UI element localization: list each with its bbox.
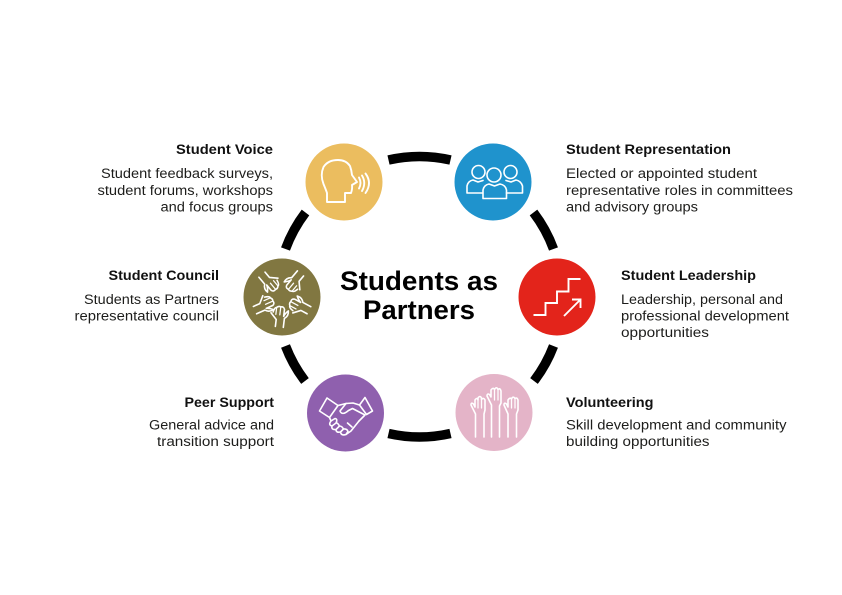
text block: peer support: Peer Support [184,395,275,410]
text block: student voice: Student Voice [176,142,274,157]
text block: student voice: student forums, workshops [98,183,273,198]
text block: volunteering [566,395,787,449]
text block: peer support: transition support [157,434,274,449]
title: Partners [363,295,475,325]
text block: volunteering: Skill development and community [566,418,787,432]
text block: student representation [566,142,793,214]
text block: student leadership: Leadership, personal and [621,292,783,307]
ring of arc segments [286,157,554,437]
text block: student leadership: professional development [621,308,789,324]
text block: student representation: and advisory groups [566,200,698,214]
icon: student leadership, stairs and arrow [518,258,596,336]
icon: student representation, three people [454,144,532,220]
text block: student voice: Student feedback surveys, [101,166,273,181]
icon: student voice, speaking head [306,144,382,220]
text block: student voice [98,142,274,214]
text block: student representation: Student Representation [566,142,731,157]
text block: student council: Student Council [108,268,219,283]
text block: volunteering: Volunteering [566,395,654,410]
text block: student voice: and focus groups [160,200,273,214]
text block: student leadership: Student Leadership [621,268,756,283]
icon: volunteering, raised hands [456,374,532,451]
title: Students as [340,266,498,296]
text block: student leadership: opportunities [621,325,709,340]
title [340,266,498,325]
text block: peer support [149,395,275,449]
text block: student council: Students as Partners [84,292,219,307]
text block: student council [74,268,219,324]
text block: student representation: representative roles in committees [566,183,793,198]
text block: student representation: Elected or appointed student [566,166,757,181]
text block: peer support: General advice and [149,418,274,432]
text block: student leadership [621,268,789,340]
icon: peer support, handshake [307,374,384,452]
text block: student council: representative council [74,308,219,324]
icon: student council, five hands [244,258,320,336]
text block: volunteering: building opportunities [566,434,710,449]
